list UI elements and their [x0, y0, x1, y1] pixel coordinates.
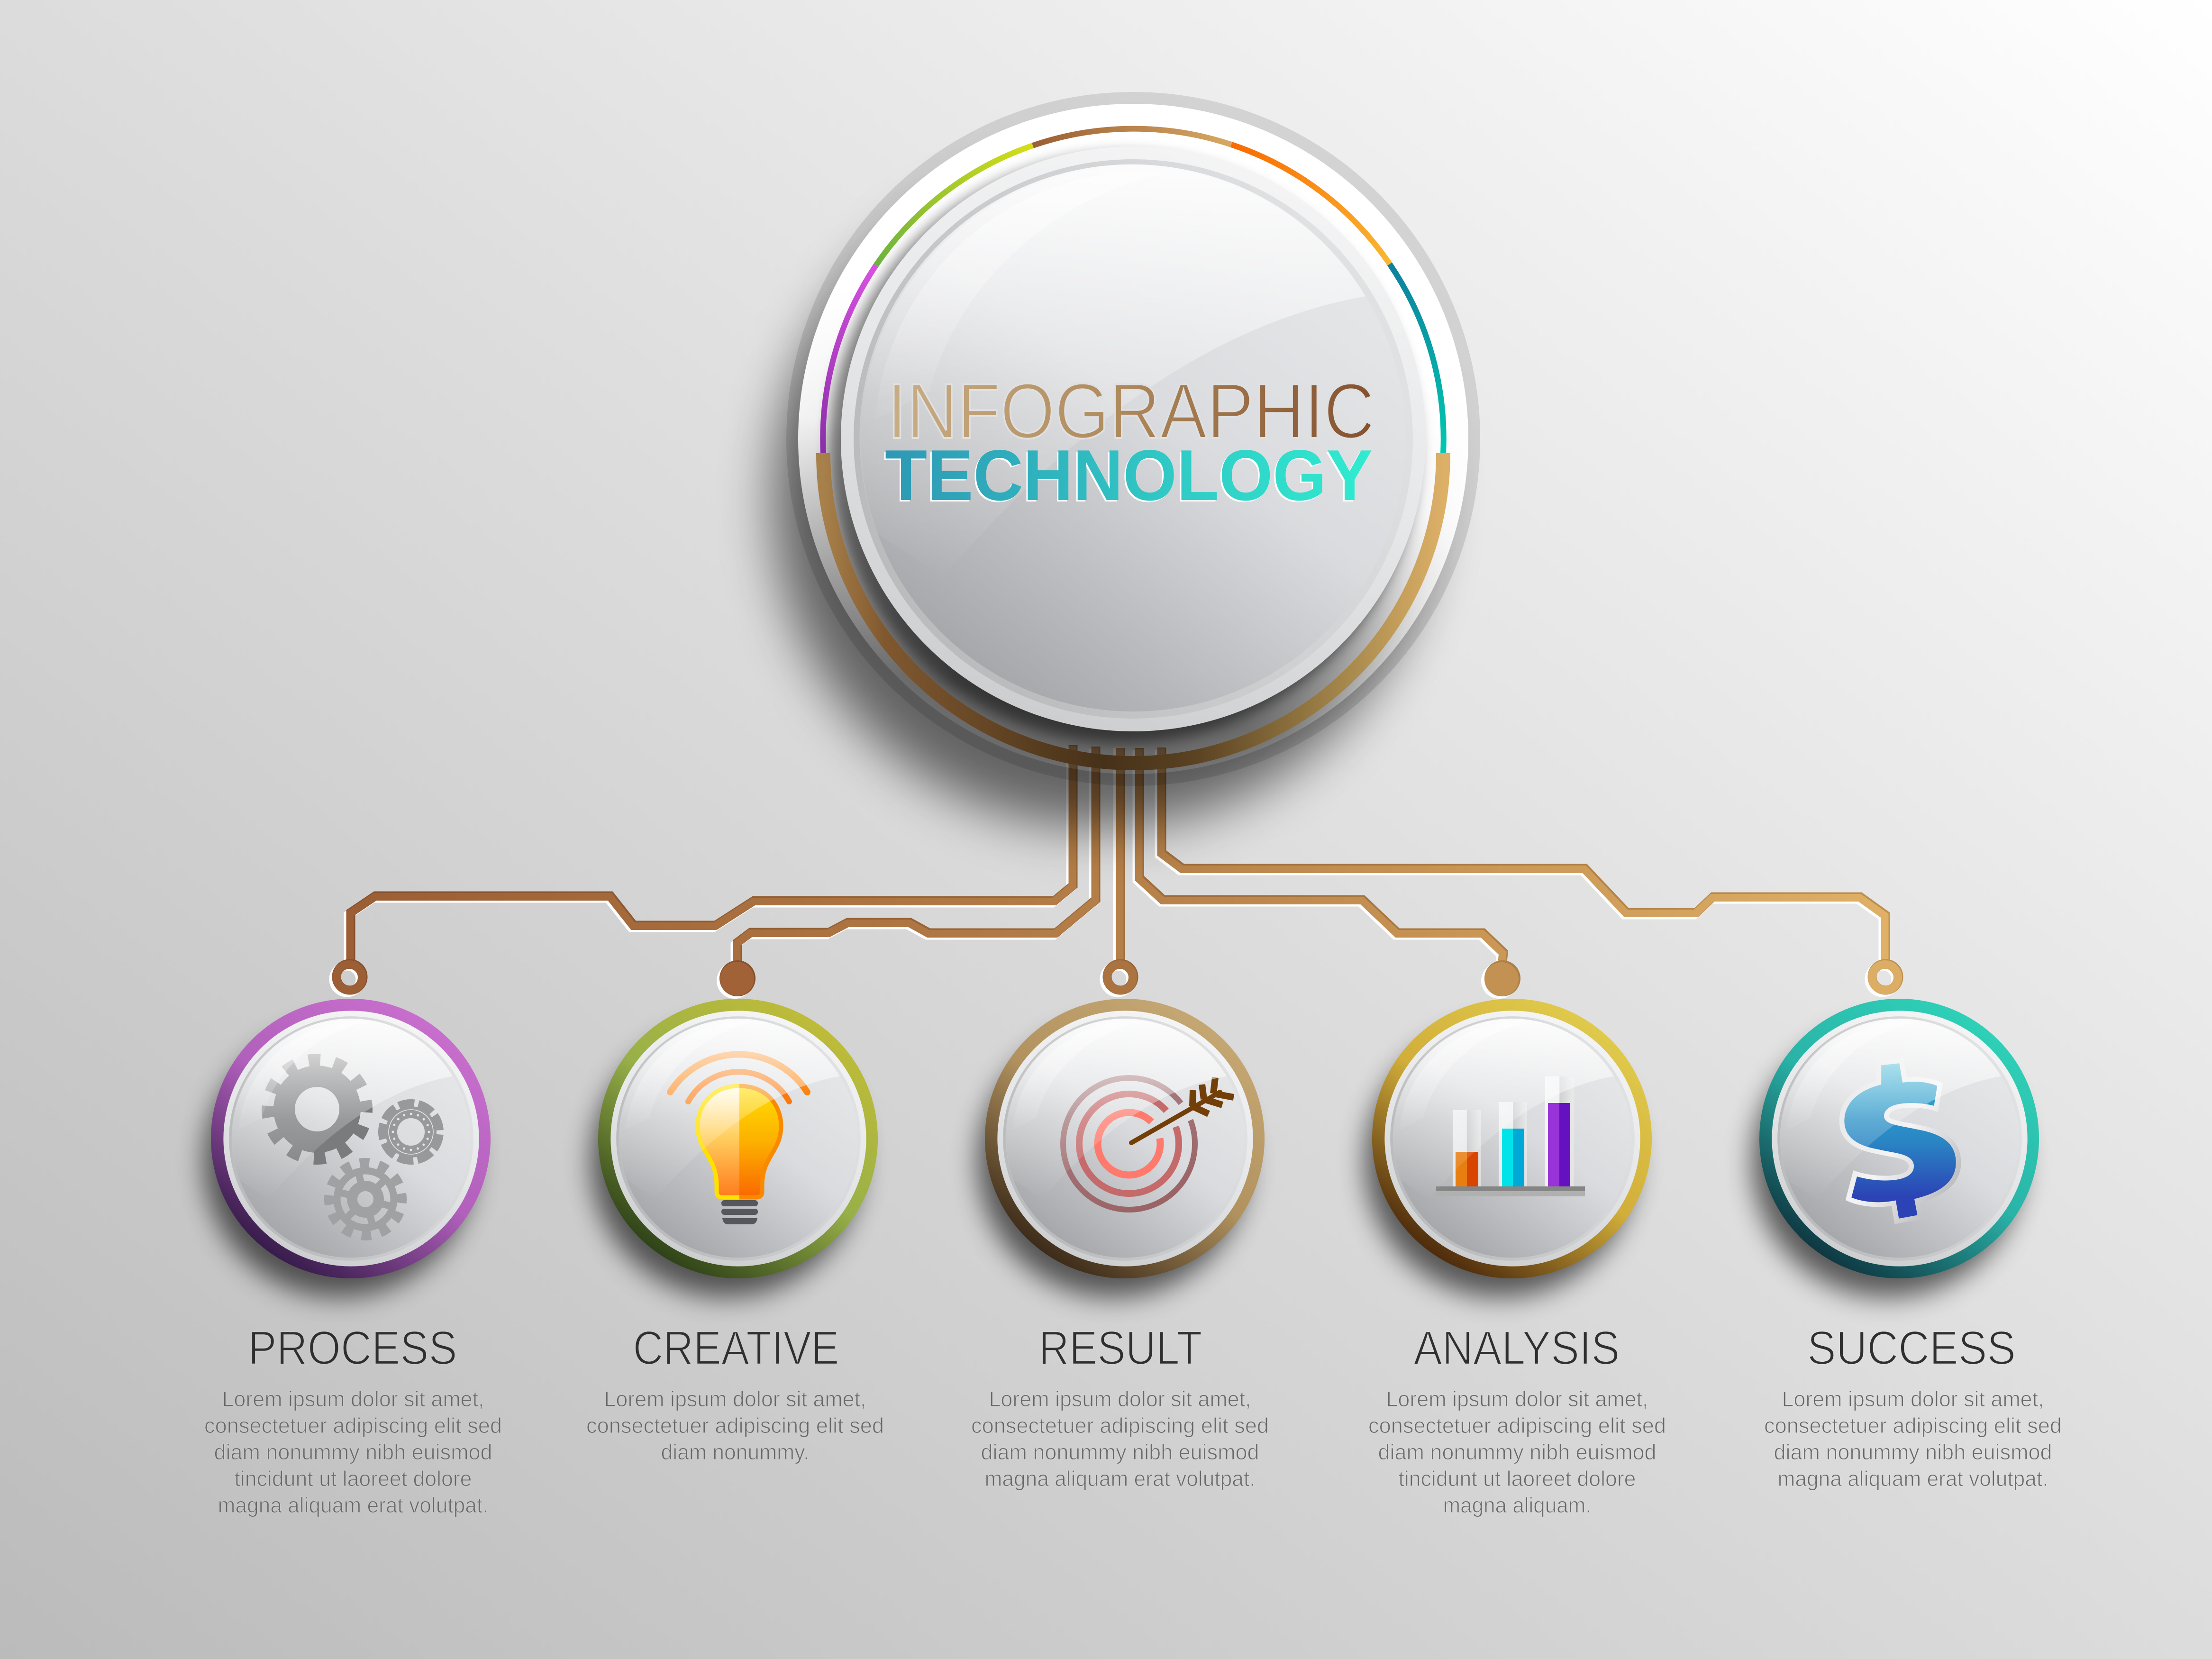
wire: creative	[717, 747, 1096, 999]
wire: process	[334, 745, 1073, 993]
text block: analysis: tincidunt ut laoreet dolore	[1398, 1467, 1636, 1491]
heading: process: PROCESS	[248, 1322, 457, 1375]
text block: creative: diam nonummy.	[661, 1440, 810, 1464]
text block: creative	[586, 1322, 884, 1464]
text block: result	[971, 1322, 1269, 1491]
text block: process: Lorem ipsum dolor sit amet,	[222, 1387, 484, 1411]
text block: analysis	[1368, 1322, 1666, 1517]
icon: target and arrow	[1044, 1058, 1234, 1229]
text block: analysis: consectetuer adipiscing elit sed	[1368, 1413, 1666, 1438]
text block: process: magna aliquam erat volutpat.	[218, 1493, 488, 1517]
panel: analysis circle	[1365, 999, 1652, 1297]
text block: creative: consectetuer adipiscing elit sed	[586, 1413, 884, 1438]
coloured top arcs	[823, 129, 1444, 453]
panel: process circle	[204, 999, 491, 1297]
wire: success	[1159, 747, 1899, 993]
icon: dollar sign	[1842, 1061, 1958, 1221]
text block: result: diam nonummy nibh euismod	[981, 1440, 1259, 1464]
wire: analysis	[1137, 748, 1520, 999]
heading: creative: CREATIVE	[633, 1322, 839, 1375]
text block: analysis: magna aliquam.	[1443, 1493, 1592, 1517]
text block: process: consectetuer adipiscing elit sed	[204, 1413, 502, 1438]
text block: success: magna aliquam erat volutpat.	[1777, 1467, 2048, 1491]
panel: main circle	[773, 98, 1474, 828]
icon: bar chart	[1436, 1076, 1585, 1196]
text block: result: magna aliquam erat volutpat.	[985, 1467, 1255, 1491]
text block: creative: Lorem ipsum dolor sit amet,	[604, 1387, 866, 1411]
bottom brown arc	[823, 453, 1443, 763]
panel: success circle	[1752, 999, 2039, 1297]
heading: success: SUCCESS	[1807, 1322, 2016, 1375]
title: infographic technology: INFOGRAPHIC	[887, 367, 1375, 455]
text block: success: Lorem ipsum dolor sit amet,	[1782, 1387, 2044, 1411]
wire traces	[334, 745, 1899, 999]
icon: gears	[260, 1052, 446, 1240]
title: infographic technology: TECHNOLOGY	[883, 437, 1371, 517]
heading: result: RESULT	[1039, 1322, 1202, 1375]
text block: process: diam nonummy nibh euismod	[214, 1440, 492, 1464]
text block: analysis: diam nonummy nibh euismod	[1378, 1440, 1656, 1464]
wire: result	[1104, 748, 1134, 993]
text block: success: consectetuer adipiscing elit sed	[1764, 1413, 2062, 1438]
text block: process: tincidunt ut laoreet dolore	[234, 1467, 472, 1491]
icon: light bulb	[670, 1054, 807, 1224]
glass lens	[841, 146, 1426, 731]
panel: creative circle	[591, 999, 878, 1297]
title: infographic technology: TECHNOLOGY	[885, 435, 1373, 516]
text block: analysis: Lorem ipsum dolor sit amet,	[1386, 1387, 1648, 1411]
text block: result: consectetuer adipiscing elit sed	[971, 1413, 1269, 1438]
text block: process	[204, 1322, 502, 1517]
text block: success	[1764, 1322, 2062, 1491]
panel: result circle	[978, 999, 1265, 1297]
text block: result: Lorem ipsum dolor sit amet,	[989, 1387, 1251, 1411]
heading: analysis: ANALYSIS	[1413, 1322, 1620, 1375]
title: infographic technology	[883, 367, 1375, 517]
text block: success: diam nonummy nibh euismod	[1774, 1440, 2052, 1464]
